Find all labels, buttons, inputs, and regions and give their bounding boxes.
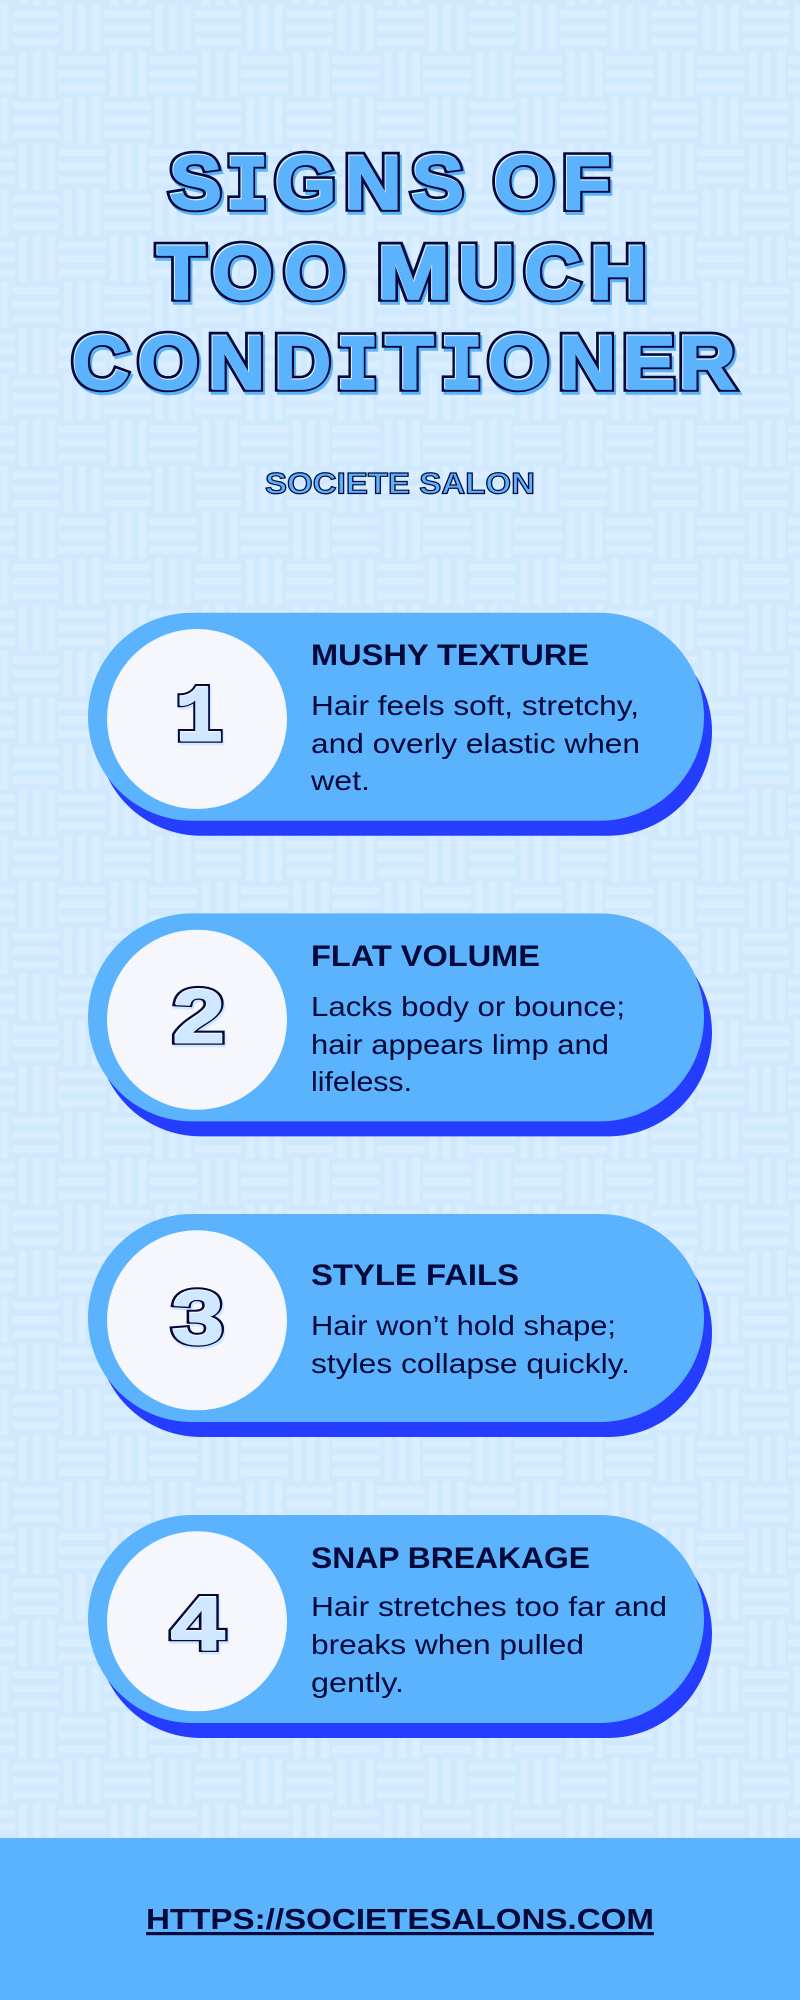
title: M [377, 231, 450, 316]
title: S [169, 140, 221, 225]
title: UCH [459, 233, 649, 318]
number 1: 1 [175, 674, 223, 765]
website link: HTTPS://SOCIETESALONS.COM [146, 1904, 654, 1936]
number 4: 4 [170, 1581, 225, 1666]
title: UCH [457, 230, 647, 315]
number 2: 2 [172, 974, 225, 1059]
title: I [440, 322, 482, 412]
title: I [226, 143, 269, 233]
title: I [336, 323, 379, 413]
number 3: 3 [171, 1275, 224, 1360]
title: COND [72, 320, 331, 405]
heading: snap breakage: SNAP BREAKAGE [311, 1542, 590, 1575]
title: GNS [274, 140, 463, 225]
title: M [379, 233, 451, 318]
title: COND [72, 321, 331, 406]
title: I [336, 322, 378, 412]
description: mushy texture: wet. [310, 765, 370, 796]
heading: style fails: STYLE FAILS [311, 1259, 519, 1292]
title: TOO [157, 230, 345, 315]
title: OF [493, 140, 610, 225]
title: S [169, 140, 221, 225]
title: I [440, 322, 482, 412]
title: OF [495, 143, 612, 228]
title: S [169, 141, 222, 226]
title: GNS [276, 143, 465, 228]
title: TOO [159, 233, 347, 318]
title: TOO [157, 231, 346, 316]
title: I [227, 145, 270, 235]
card 4: snap breakage [88, 1515, 712, 1738]
footer band [0, 1838, 800, 2000]
description: mushy texture: Hair feels soft, stretchy, [311, 690, 639, 721]
title: ONER [487, 320, 735, 405]
title: T [386, 321, 434, 406]
title [72, 140, 737, 415]
title: TOO [157, 230, 345, 315]
card 1: mushy texture [88, 613, 712, 836]
number 3: 3 [171, 1275, 224, 1360]
description: snap breakage: breaks when pulled [311, 1629, 584, 1660]
number 1: 1 [176, 677, 225, 768]
number 4: 4 [171, 1582, 226, 1667]
number 4: 4 [172, 1584, 227, 1668]
description: snap breakage: Hair stretches too far and [311, 1591, 667, 1622]
number 1: 1 [175, 675, 224, 766]
heading: flat volume: FLAT VOLUME [311, 940, 540, 973]
description: style fails: Hair won’t hold shape; [311, 1310, 616, 1341]
number 2: 2 [173, 975, 226, 1060]
description: snap breakage: gently. [311, 1667, 404, 1698]
title: T [385, 320, 433, 405]
subtitle: SOCIETE SALON [265, 468, 535, 500]
description: style fails [311, 1310, 630, 1379]
description: flat volume: Lacks body or bounce; [311, 991, 625, 1022]
title: I [336, 322, 378, 412]
title: I [338, 325, 380, 415]
title: OF [493, 140, 610, 225]
title: I [440, 323, 483, 413]
title: UCH [457, 230, 647, 315]
title: M [377, 230, 449, 315]
title: UCH [458, 231, 647, 316]
title: I [225, 142, 268, 232]
title: T [385, 320, 433, 405]
title: COND [74, 323, 333, 408]
number 4: 4 [170, 1581, 225, 1666]
description: mushy texture [310, 690, 640, 796]
title: GNS [274, 140, 463, 225]
title: M [377, 230, 449, 315]
title: ONER [487, 320, 735, 405]
title: ONER [489, 323, 737, 408]
card 2: flat volume [88, 913, 712, 1136]
title: GNS [275, 141, 464, 226]
number 3: 3 [173, 1278, 225, 1362]
title: I [442, 325, 484, 415]
description: flat volume: hair appears limp and [311, 1029, 609, 1060]
title: I [225, 142, 268, 232]
heading: mushy texture: MUSHY TEXTURE [311, 639, 589, 672]
description: flat volume: lifeless. [311, 1066, 412, 1097]
title: S [171, 143, 223, 228]
number 2: 2 [172, 974, 225, 1059]
description: style fails: styles collapse quickly. [311, 1348, 630, 1379]
card 3: style fails [88, 1214, 712, 1437]
number 2: 2 [174, 977, 226, 1061]
title: OF [494, 141, 611, 226]
title: COND [72, 320, 331, 405]
description: mushy texture: and overly elastic when [311, 728, 640, 759]
description: snap breakage [311, 1591, 667, 1698]
description: flat volume [311, 991, 625, 1097]
number 3: 3 [172, 1276, 225, 1361]
title: ONER [488, 321, 736, 406]
title: T [387, 323, 435, 408]
number 1: 1 [175, 674, 223, 765]
